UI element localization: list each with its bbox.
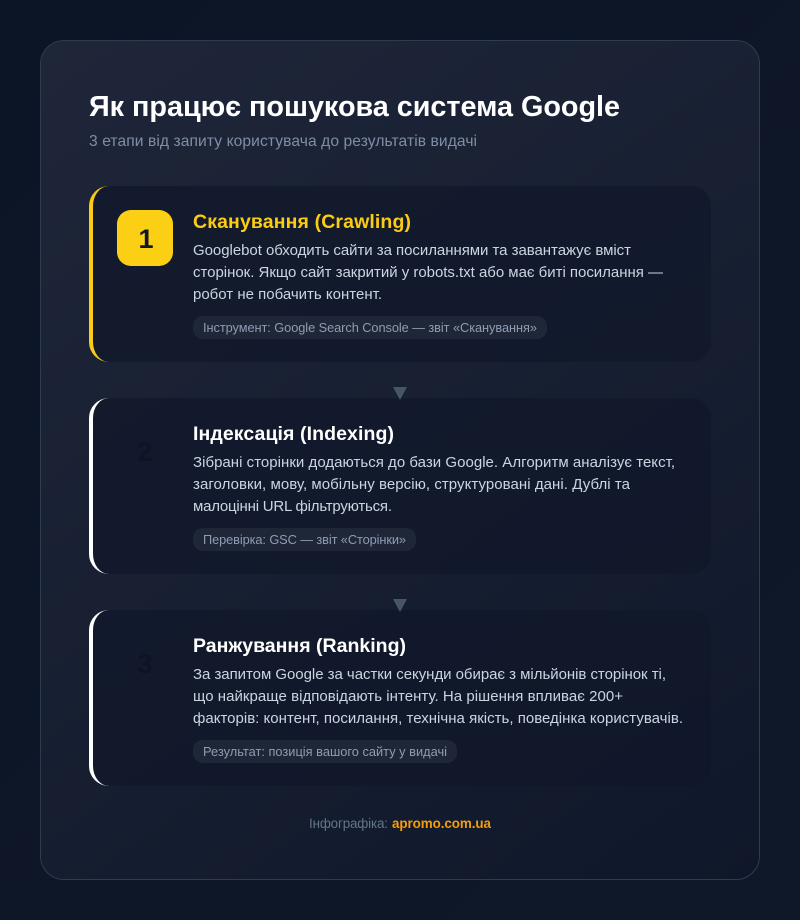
text: step 3 description: що найкраще відповідають інтенту. На рішення впливає 200+ xyxy=(193,688,623,705)
step 2 number: 2 xyxy=(137,437,153,467)
heading: step 2 title: Індексація (Indexing) xyxy=(193,423,394,445)
text: step 2 description: заголовки, мову, мобільну версію, структуровані дані. Дублі та xyxy=(193,476,631,493)
text: step 3 description: факторів: контент, посилання, технічна якість, поведінка користувачів. xyxy=(193,710,683,727)
text: subtitle: 3 етапи від запиту користувача до результатів видачі xyxy=(89,133,477,150)
text: step 1 description: робот не побачить контент. xyxy=(193,286,382,303)
tag: step 1 tool pill xyxy=(193,316,547,339)
text: step 1 description: Googlebot обходить сайти за посиланнями та завантажує вміст xyxy=(193,242,631,259)
panel: step 2 card xyxy=(89,398,711,574)
text: footer credit: Інфографіка: xyxy=(309,816,388,831)
tag: step 2 check pill xyxy=(193,528,416,551)
step 3 number: 3 xyxy=(137,649,153,679)
text: step 2 description: малоцінні URL фільтруються. xyxy=(193,498,392,515)
heading: step 3 title: Ранжування (Ranking) xyxy=(193,635,406,657)
text: step 1 tool label: Інструмент: Google Search Console — звіт «Сканування» xyxy=(203,320,537,335)
arrow: step 2 to step 3 xyxy=(393,599,407,612)
step 1 number: 1 xyxy=(138,224,154,254)
text: step 2 description xyxy=(193,454,675,515)
arrow: step 1 to step 2 xyxy=(393,387,407,400)
text: step 1 description: сторінок. Якщо сайт закритий у robots.txt або має биті посилання — xyxy=(193,264,663,281)
panel: step 1 card xyxy=(89,186,711,362)
text: step 3 result label: Результат: позиція вашого сайту у видачі xyxy=(203,744,447,759)
text: step 3 description xyxy=(193,666,683,727)
text: step 2 check label: Перевірка: GSC — звіт «Сторінки» xyxy=(203,532,406,547)
icon: step 1 badge xyxy=(117,210,173,266)
tag: step 3 result pill xyxy=(193,740,457,763)
text: step 2 description: Зібрані сторінки додаються до бази Google. Алгоритм аналізує текст, xyxy=(193,454,675,471)
panel: step 3 card xyxy=(89,610,711,786)
text: footer credit: apromo.com.ua xyxy=(392,816,492,831)
text: step 3 description: За запитом Google за частки секунди обирає з мільйонів сторінок ті, xyxy=(193,666,666,683)
heading: step 1 title: Сканування (Crawling) xyxy=(193,211,411,233)
heading: title: Як працює пошукова система Google xyxy=(89,91,620,123)
text: step 1 description xyxy=(193,242,663,303)
